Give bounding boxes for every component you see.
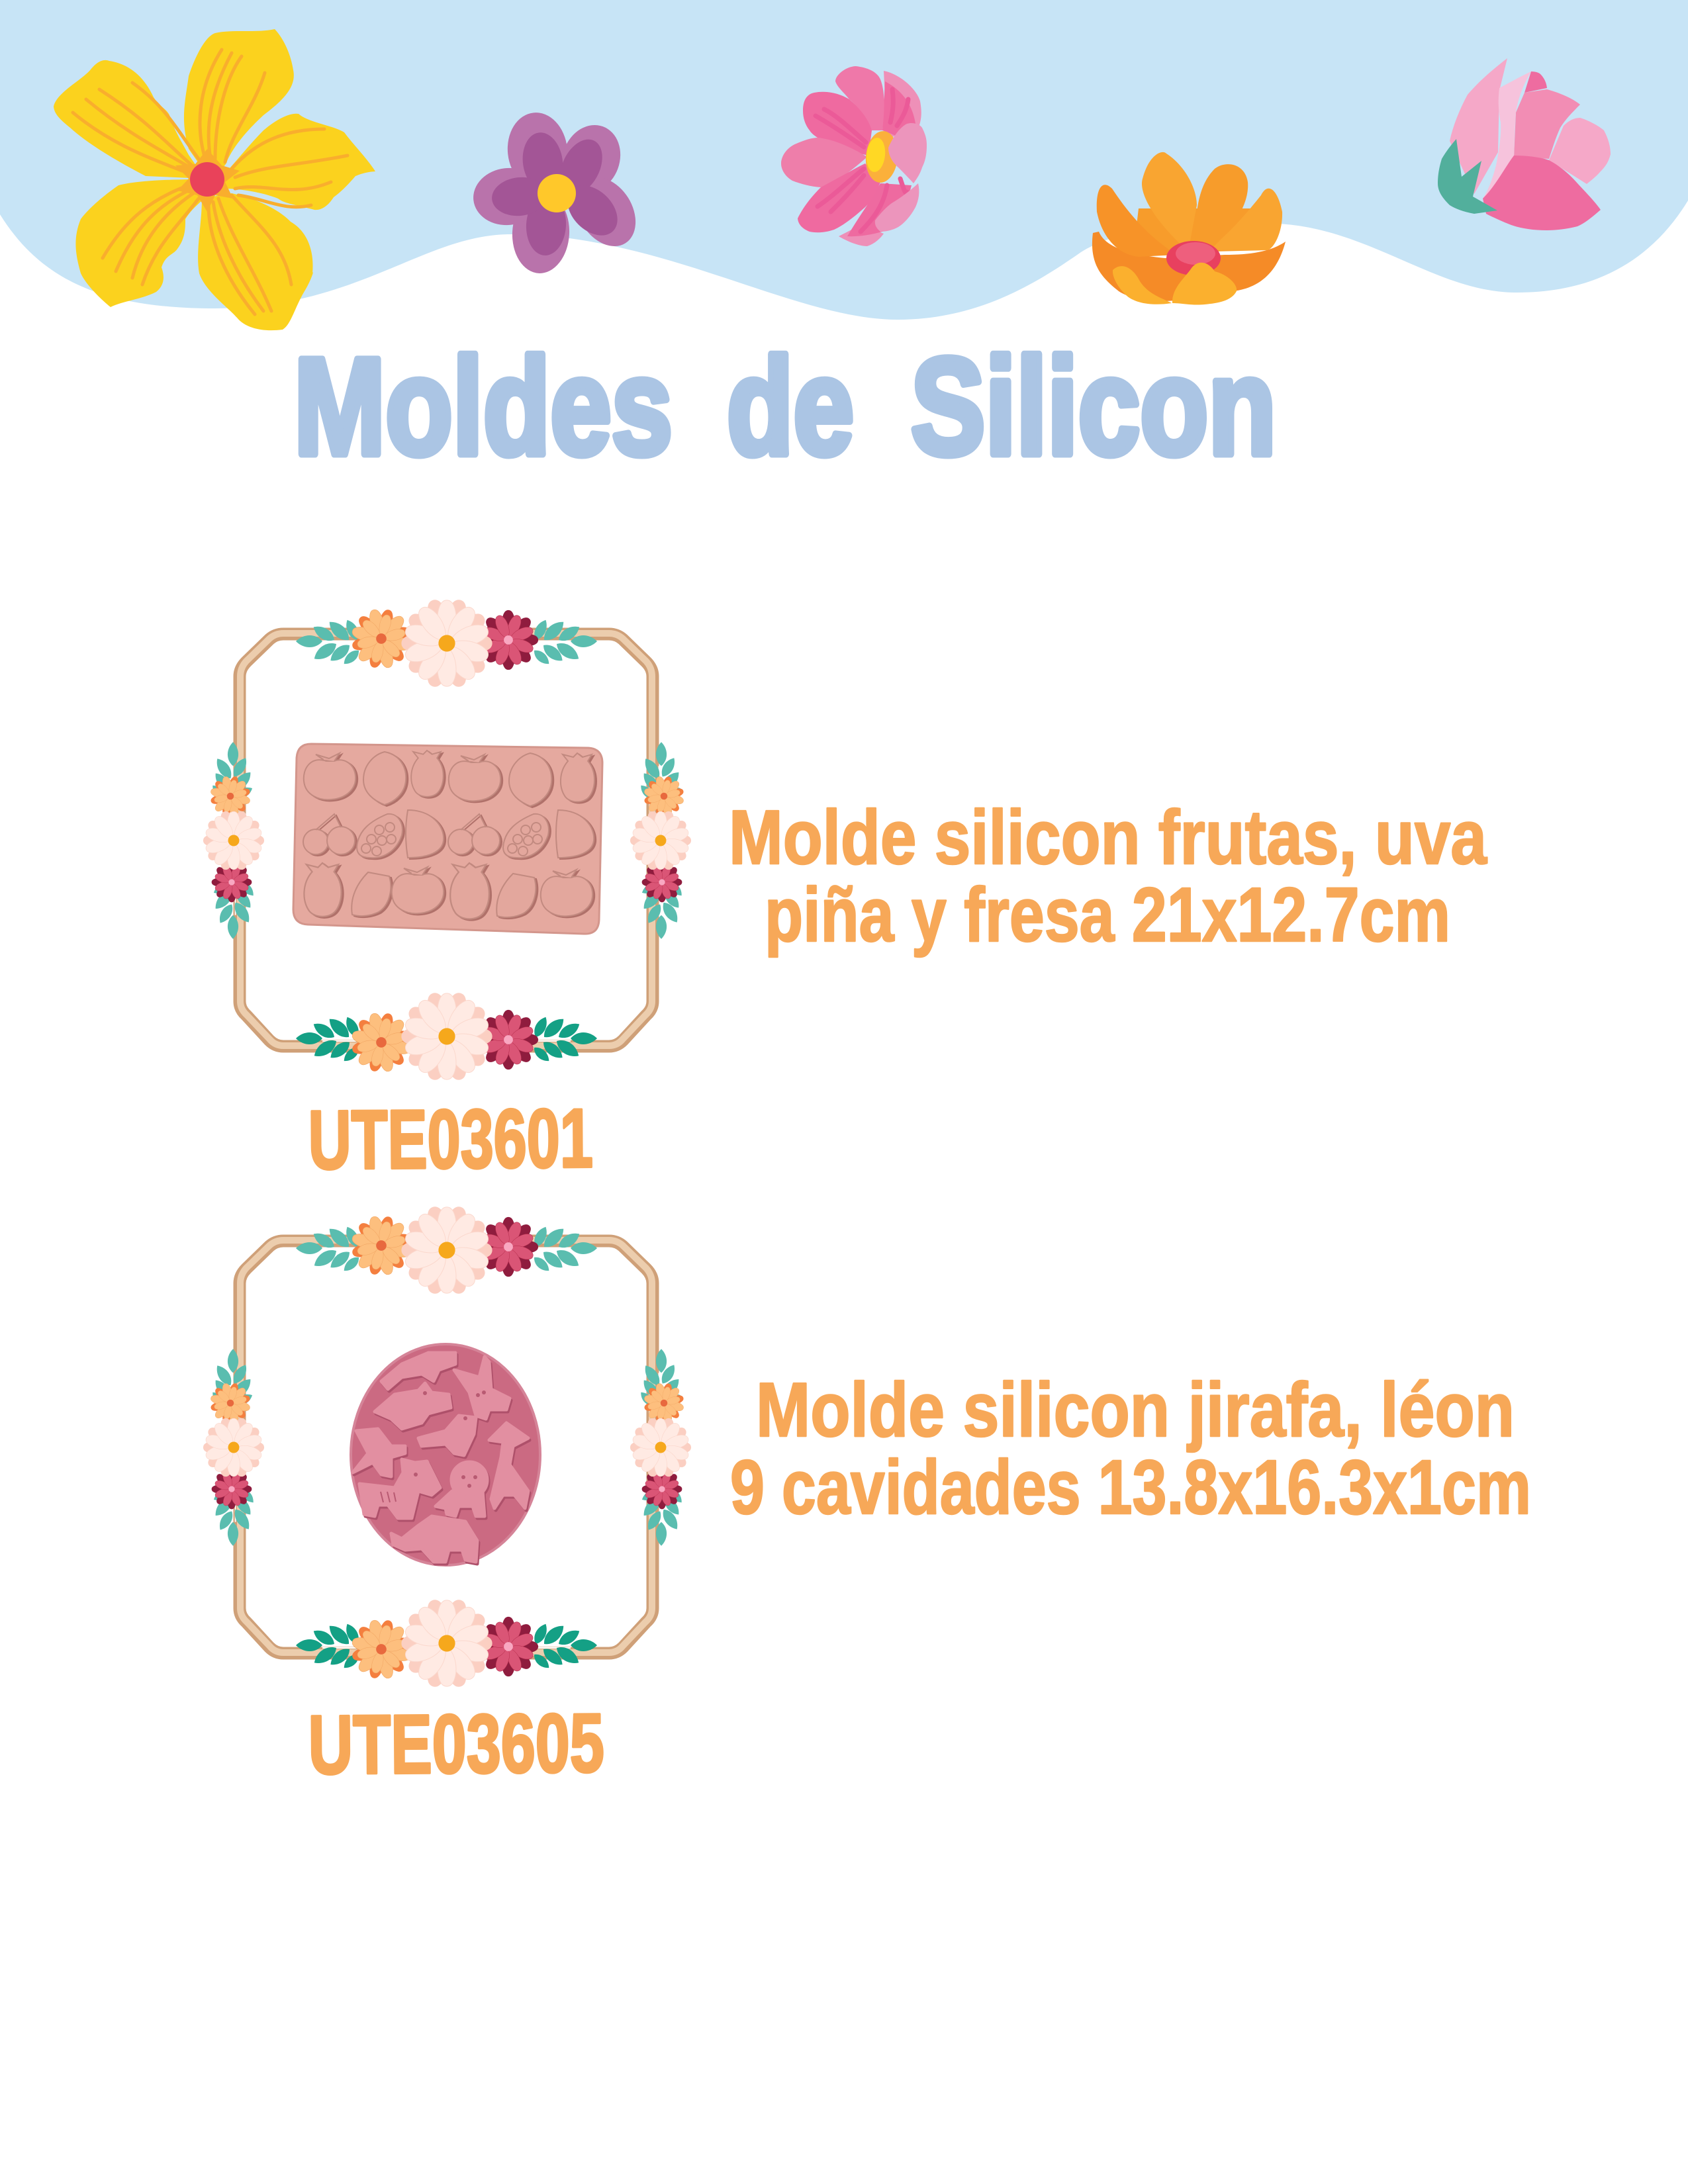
floral frame 1 (203, 597, 691, 1083)
background wave (0, 0, 1688, 320)
title: Silicon (911, 330, 1276, 484)
product code 1: UTE03601 (308, 1091, 593, 1187)
icon: orange flower (1092, 152, 1286, 305)
title (294, 330, 1276, 484)
mold: animals (351, 1344, 540, 1565)
title: Moldes (294, 330, 673, 484)
description 2 (730, 1367, 1531, 1530)
icon: yellow flower (54, 29, 375, 330)
icon: pink flower (781, 66, 927, 246)
description 1 (729, 794, 1487, 958)
title: de (727, 330, 854, 484)
icon: pink rose bud (1438, 58, 1611, 230)
mold: fruits (293, 744, 602, 934)
description 1: Molde silicon frutas, uva (729, 794, 1487, 880)
panel: product 1 (203, 597, 1487, 1187)
description 2: Molde silicon jirafa, léon (756, 1367, 1515, 1453)
panel: product 2 (203, 1204, 1531, 1792)
product code 2: UTE03605 (308, 1696, 604, 1792)
icon: purple flower (471, 110, 648, 275)
description 1: piña y fresa 21x12.7cm (765, 872, 1450, 958)
floral frame 2 (203, 1204, 691, 1690)
